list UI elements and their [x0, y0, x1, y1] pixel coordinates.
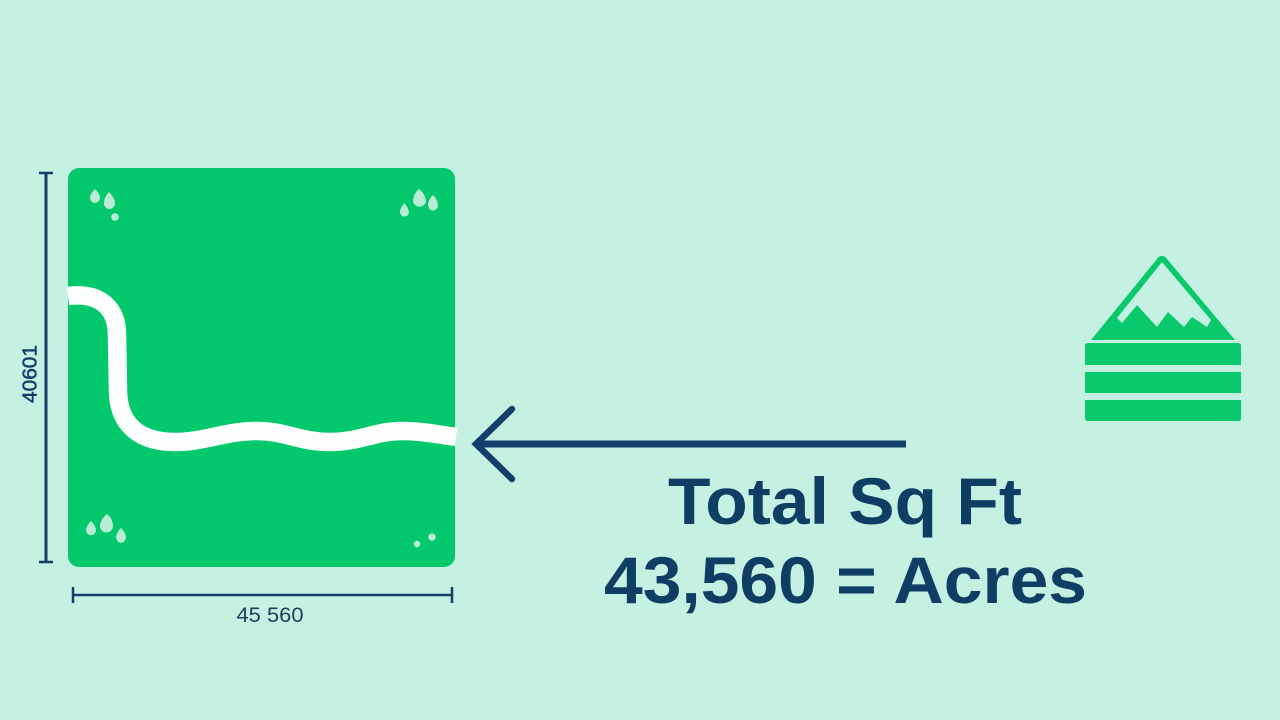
- snow cap: [1117, 262, 1211, 327]
- icon: top-right droplets: [400, 189, 438, 216]
- icon: top-left droplets: [90, 189, 119, 221]
- formula line 1: Total Sq Ft: [668, 464, 1022, 538]
- vertical dimension line: [39, 172, 53, 562]
- icon: bottom-right droplets: [414, 533, 436, 547]
- strata bar 1: [1085, 343, 1241, 365]
- horizontal dimension label: 45 560: [236, 604, 304, 627]
- mountain: [1091, 256, 1235, 340]
- icon: bottom-left droplets: [86, 514, 126, 543]
- arrow pointing to parcel: [476, 409, 906, 479]
- panel: green land parcel: [68, 168, 456, 567]
- formula line 2: 43,560 = Acres: [604, 543, 1087, 617]
- strata bar 3: [1085, 400, 1241, 421]
- vertical dimension label: 40601: [20, 345, 42, 403]
- formula text: [604, 464, 1087, 617]
- icon: mountain with strata: [1085, 256, 1241, 421]
- icon: white river: [68, 295, 456, 442]
- strata bar 2: [1085, 372, 1241, 393]
- horizontal dimension line: [73, 587, 452, 603]
